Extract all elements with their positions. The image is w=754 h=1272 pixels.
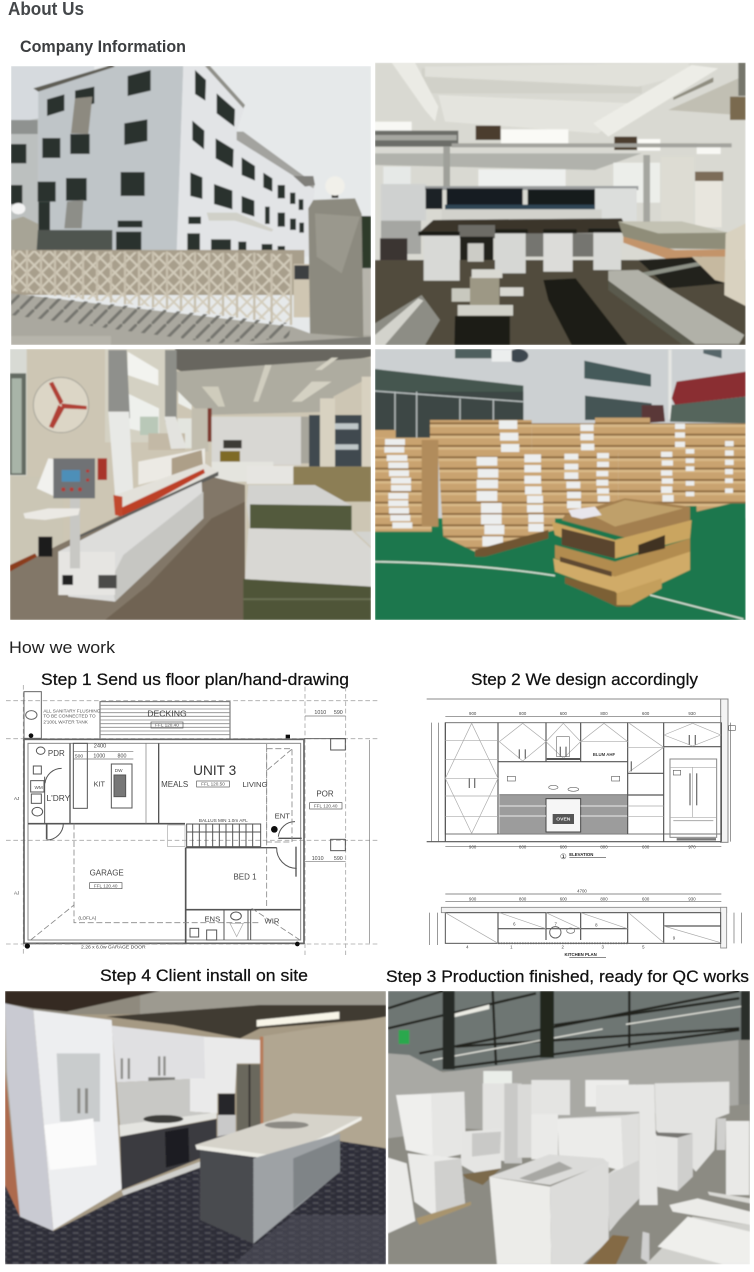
elevation drawing: 930 (688, 711, 696, 716)
drawing: floor plan unit 3: (LOFLA) (78, 915, 97, 920)
kitchen plan drawing: 800 (519, 896, 527, 901)
drawing: floor plan unit 3: POR (316, 790, 334, 799)
elevation drawing: 600 (642, 711, 650, 716)
kitchen plan drawing: 3 (601, 945, 604, 950)
drawing: kitchen elevation and plan (427, 699, 742, 958)
kitchen plan drawing: 600 (560, 896, 568, 901)
elevation drawing (427, 699, 735, 861)
drawing: floor plan unit 3: FFL 120.40 (94, 883, 118, 888)
photo: edge banding machine (10, 349, 371, 620)
kitchen plan drawing: 7 (554, 922, 557, 927)
drawing: floor plan unit 3: MEALS (161, 780, 188, 789)
drawing: floor plan unit 3: AJ (14, 796, 19, 801)
kitchen plan drawing: KITCHEN PLAN (565, 952, 597, 957)
drawing: floor plan unit 3: L'DRY (47, 793, 71, 803)
step 1 heading: Step 1 Send us floor plan/hand-drawing (41, 670, 349, 689)
elevation drawing: BLUM AHF (593, 752, 616, 757)
drawing: floor plan unit 3: 1000 (93, 753, 105, 759)
elevation drawing: ELEVATION (569, 852, 593, 857)
drawing: floor plan unit 3 (6, 685, 380, 955)
elevation drawing: 600 (560, 711, 568, 716)
drawing: floor plan unit 3: 590 (334, 856, 343, 862)
kitchen plan drawing: 9 (673, 935, 676, 940)
kitchen plan drawing: 600 (642, 896, 650, 901)
photo: finished cabinets in factory (388, 991, 750, 1264)
drawing: floor plan unit 3: ALL SANITARY FLUSHING (43, 708, 101, 713)
drawing: floor plan unit 3: 1010 (314, 710, 326, 716)
drawing: floor plan unit 3: AJ (14, 890, 19, 895)
drawing: floor plan unit 3: WIR (265, 917, 280, 926)
elevation drawing: 800 (519, 844, 527, 849)
kitchen plan drawing: 900 (469, 896, 477, 901)
kitchen plan drawing: 4700 (577, 889, 587, 894)
drawing: floor plan unit 3: 1010 (312, 856, 324, 862)
kitchen plan drawing (429, 889, 742, 958)
kitchen plan drawing: 1 (510, 945, 513, 950)
drawing: floor plan unit 3: BALLUS MIN 1.0m AFL (199, 818, 248, 823)
drawing: floor plan unit 3: 2'100L WATER TANK (43, 720, 89, 725)
elevation drawing: 970 (688, 844, 696, 849)
drawing: floor plan unit 3: TO BE CONNECTED TO (43, 714, 96, 719)
kitchen plan drawing: 8 (595, 923, 598, 928)
drawing: floor plan unit 3: FFL 120.40 (155, 723, 179, 728)
drawing: floor plan unit 3: GARAGE (90, 869, 124, 878)
photo: installed kitchen on site (5, 991, 386, 1264)
kitchen plan drawing: 4 (466, 945, 469, 950)
photo: packed boxes and pallets (375, 349, 746, 620)
drawing: floor plan unit 3: UNIT 3 (193, 763, 236, 778)
elevation drawing: 800 (600, 711, 608, 716)
drawing: floor plan unit 3: FFL 120.40 (314, 804, 338, 809)
drawing: floor plan unit 3: ENT (275, 812, 290, 821)
drawing: floor plan unit 3: 800 (118, 753, 126, 759)
drawing: floor plan unit 3: DECKING (147, 709, 187, 719)
step 4 heading: Step 4 Client install on site (100, 966, 308, 985)
drawing: floor plan unit 3: FFL 120.50 (201, 782, 225, 787)
kitchen plan drawing: 800 (600, 896, 608, 901)
elevation drawing: 600 (642, 844, 650, 849)
heading: How we work: How we work (9, 638, 116, 657)
drawing: floor plan unit 3: 500 (75, 753, 83, 759)
drawing: floor plan unit 3: 590 (334, 710, 343, 716)
drawing: floor plan unit 3: ENS (204, 914, 220, 923)
drawing: floor plan unit 3: BED 1 (233, 872, 257, 881)
drawing: floor plan unit 3: PDR (48, 749, 65, 758)
drawing: floor plan unit 3: WM (35, 785, 43, 790)
elevation drawing: 900 (469, 844, 477, 849)
drawing: floor plan unit 3: 2.26 x 6.0w GARAGE DOOR (81, 945, 146, 951)
elevation drawing: 600 (560, 844, 568, 849)
elevation drawing: 800 (519, 711, 527, 716)
drawing: floor plan unit 3: 2400 (94, 743, 106, 749)
step 2 heading: Step 2 We design accordingly (471, 670, 698, 689)
elevation drawing: OVEN (556, 817, 571, 823)
kitchen plan drawing: 6 (513, 922, 516, 927)
step 3 heading: Step 3 Production finished, ready for QC works (386, 967, 749, 986)
elevation drawing: ① (560, 852, 567, 861)
drawing: floor plan unit 3: DW (115, 768, 123, 773)
kitchen plan drawing: 5 (642, 945, 645, 950)
drawing: floor plan unit 3: KIT (94, 780, 106, 789)
photo: company building exterior (11, 65, 371, 345)
drawing: floor plan unit 3: LIVING (242, 780, 268, 789)
kitchen plan drawing: 2 (561, 945, 564, 950)
heading: Company Information: Company Information (20, 37, 186, 56)
elevation drawing: 900 (469, 711, 477, 716)
kitchen plan drawing: 930 (688, 896, 696, 901)
photo: factory panel saw workshop (375, 63, 746, 345)
elevation drawing: 800 (600, 844, 608, 849)
